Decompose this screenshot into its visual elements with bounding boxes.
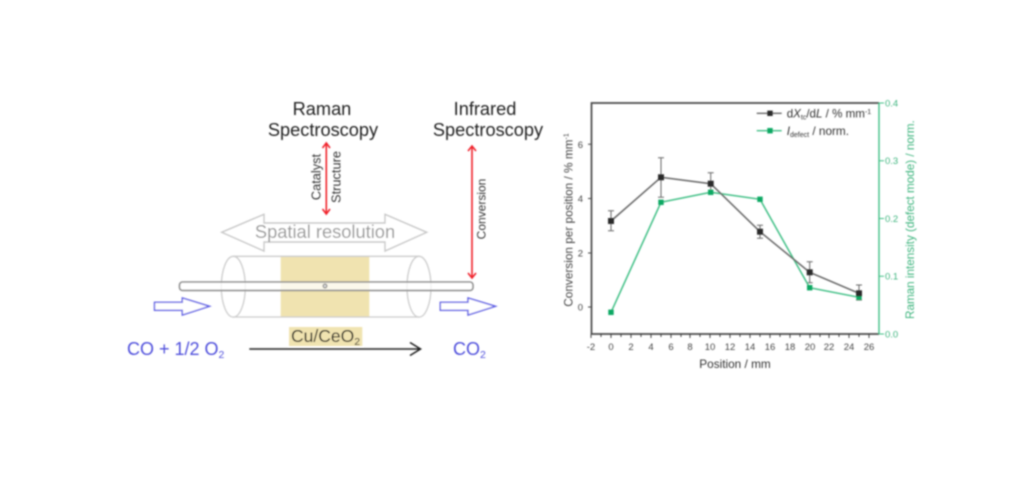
x tick labels: 0 xyxy=(608,342,614,353)
legend: I xyxy=(787,124,791,138)
product: 2 xyxy=(480,349,486,361)
left y axis title: -1 xyxy=(564,133,570,140)
heading: Infrared Spectroscopy: Spectroscopy xyxy=(433,120,544,140)
legend: -1 xyxy=(865,109,871,116)
reactants: CO + 1/2 O xyxy=(127,339,219,359)
x tick labels xyxy=(587,342,874,353)
catalyst label: 2 xyxy=(354,336,360,348)
left y axis ticks xyxy=(588,144,592,307)
x tick labels: -2 xyxy=(587,342,595,353)
x tick labels: 18 xyxy=(785,342,795,353)
x tick labels: 14 xyxy=(745,342,755,353)
x tick labels: 22 xyxy=(824,342,834,353)
x axis title: Position / mm xyxy=(699,357,771,371)
catalyst bed xyxy=(281,256,369,317)
x tick labels: 24 xyxy=(844,342,854,353)
label: Structure: Structure xyxy=(328,151,344,203)
capillary tube xyxy=(180,282,473,290)
arrow: spatial resolution xyxy=(222,214,427,251)
left y tick labels: 2 xyxy=(578,248,583,260)
x tick labels: 20 xyxy=(805,342,815,353)
arrow: infrared conversion xyxy=(468,146,476,278)
right y tick labels: 0.2 xyxy=(885,214,898,225)
right y tick labels: 0.3 xyxy=(885,156,898,167)
reactor cylinder xyxy=(221,256,431,317)
heading: Raman Spectroscopy: Spectroscopy xyxy=(268,120,379,140)
series: Raman defect intensity xyxy=(608,190,862,315)
reactants: 2 xyxy=(219,349,225,361)
right y axis title: Raman intensity (defect mode) / norm. xyxy=(904,120,917,319)
product: CO xyxy=(453,339,480,359)
panel: reactor diagram xyxy=(127,99,544,361)
x axis ticks xyxy=(591,334,869,338)
legend: / norm. xyxy=(809,124,849,138)
arrow: gas inlet xyxy=(154,298,210,315)
x tick labels: 4 xyxy=(648,342,654,353)
label: Spatial resolution: Spatial resolution xyxy=(255,221,395,242)
heading: Raman Spectroscopy: Raman xyxy=(293,99,351,119)
arrow: gas outlet xyxy=(440,298,496,315)
right y tick labels: 0.0 xyxy=(885,330,898,340)
legend: L / % mm xyxy=(816,107,865,120)
heading: Infrared Spectroscopy: Infrared xyxy=(454,99,516,119)
x tick labels: 12 xyxy=(725,342,735,353)
label: Conversion: Conversion xyxy=(474,179,488,239)
arrow: reaction xyxy=(249,342,420,356)
legend: tc xyxy=(801,114,807,121)
left y axis title: Conversion per position / % mm xyxy=(562,140,576,307)
error bars xyxy=(608,158,862,300)
left y tick labels: 6 xyxy=(578,140,583,151)
right y tick labels xyxy=(885,98,898,340)
right y tick labels: 0.4 xyxy=(885,98,898,110)
left y tick labels: 4 xyxy=(578,194,583,205)
catalyst label: Cu/CeO xyxy=(291,326,354,346)
legend: defect xyxy=(790,132,809,139)
x tick labels: 6 xyxy=(668,342,674,353)
legend xyxy=(757,107,871,139)
plot frame xyxy=(592,103,879,334)
x tick labels: 26 xyxy=(864,342,874,353)
label: Catalyst: Catalyst xyxy=(308,153,324,200)
x tick labels: 10 xyxy=(705,342,715,353)
right y axis ticks xyxy=(879,103,884,334)
x tick labels: 16 xyxy=(765,342,775,353)
right y tick labels: 0.1 xyxy=(885,272,898,283)
x tick labels: 8 xyxy=(687,342,693,353)
legend: /d xyxy=(806,107,816,120)
panel: line chart xyxy=(562,98,917,371)
left y tick labels xyxy=(578,140,583,314)
legend: dX xyxy=(787,107,801,120)
series: conversion per position xyxy=(608,174,862,296)
x tick labels: 2 xyxy=(628,342,634,353)
left y tick labels: 0 xyxy=(578,302,583,314)
arrow: Raman catalyst structure xyxy=(322,143,330,214)
